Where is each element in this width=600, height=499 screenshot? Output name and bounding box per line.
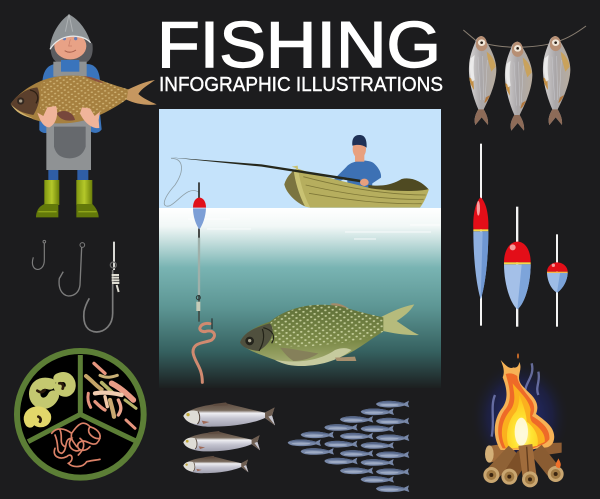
small hook (32, 243, 44, 269)
bobber in scene (193, 182, 206, 322)
panel: fishing scene (159, 109, 441, 388)
spark (517, 353, 519, 359)
dried fish 2 (505, 42, 532, 131)
medium hook (59, 247, 82, 296)
grubs (29, 377, 71, 423)
water (159, 208, 441, 388)
back logs (485, 443, 562, 463)
large salmon (183, 402, 275, 427)
angler hand (360, 179, 369, 186)
worms (52, 423, 100, 467)
dried fish 1 (469, 36, 496, 125)
illustration: dried fish on a string (463, 26, 586, 131)
big green fish (240, 302, 419, 366)
illustration: campfire (470, 353, 570, 487)
maggots (86, 363, 136, 428)
illustration: three salmon (183, 402, 275, 473)
smoke (492, 363, 539, 437)
hero fish (11, 73, 157, 123)
face (54, 33, 86, 59)
small salmon (183, 456, 248, 473)
dried fish 3 (543, 36, 570, 125)
fishing line (164, 158, 199, 206)
illustration: school of small fish (288, 401, 409, 492)
worm on hook (193, 323, 214, 382)
illustration: fisherman holding big fish (11, 14, 157, 217)
flames (495, 360, 554, 450)
medium float (504, 207, 531, 327)
boat (284, 166, 429, 208)
log ends (483, 466, 564, 487)
angler (333, 135, 381, 191)
illustration: three floats (473, 144, 568, 327)
subtitle: INFOGRAPHIC ILLUSTRATIONS (159, 73, 443, 96)
tall float (473, 144, 488, 326)
small float (547, 234, 568, 327)
torso (39, 60, 102, 181)
water highlights (188, 219, 440, 239)
hands (37, 106, 100, 128)
icon: three fishing hooks (32, 240, 119, 332)
helmet (50, 14, 91, 49)
front logs (491, 445, 556, 479)
large hook with knot (84, 270, 113, 332)
sky (159, 109, 441, 209)
boots (36, 180, 99, 217)
hair (51, 37, 93, 63)
small flame on log (556, 458, 561, 468)
hook in scene (210, 318, 213, 329)
panel: bait wheel (17, 351, 144, 478)
fishing rod (170, 157, 361, 182)
medium salmon (183, 431, 260, 451)
title: FISHING (157, 8, 441, 81)
